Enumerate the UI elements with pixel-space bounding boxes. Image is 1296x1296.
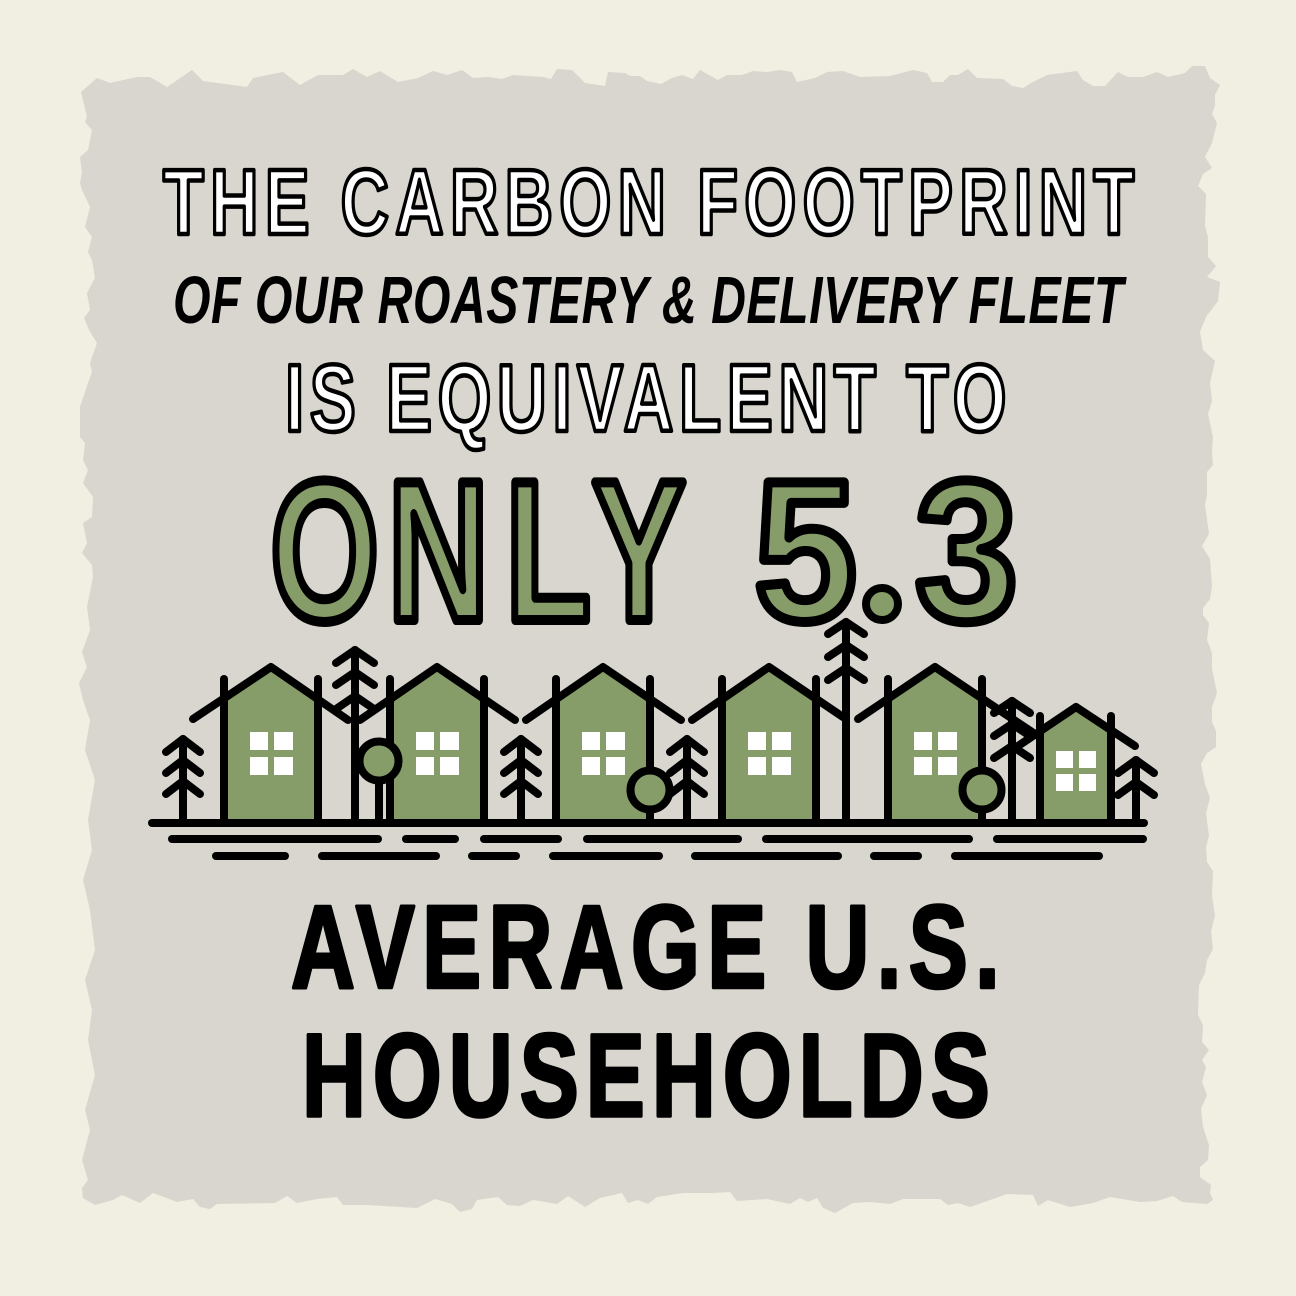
- small house: [1018, 707, 1135, 823]
- house 2: [360, 667, 515, 823]
- house 4: [692, 667, 843, 823]
- heading: households: HOUSEHOLDS: [302, 1011, 990, 1142]
- tree: tallest pine: [828, 622, 864, 823]
- tree: far left pine: [166, 739, 200, 823]
- panel: torn paper: [79, 66, 1220, 1213]
- round tree 1: [360, 742, 398, 823]
- big number: only 5.3: ONLY: [270, 439, 686, 663]
- tree: pine between houses 3 and 4: [670, 739, 704, 823]
- heading: average u.s.: AVERAGE U.S.: [291, 882, 1000, 1014]
- heading: is equivalent to: IS EQUIVALENT TO: [285, 344, 1006, 452]
- tree: tall pine between houses 1 and 2: [336, 650, 374, 823]
- heading: the carbon footprint: THE CARBON FOOTPRINT: [163, 151, 1134, 255]
- house 3: [526, 667, 681, 823]
- big number: only 5.3: [270, 439, 1018, 663]
- road dashes: [172, 839, 1143, 856]
- illustration: row of houses and trees: [152, 622, 1154, 856]
- round tree 3: [962, 770, 1002, 823]
- big number: only 5.3: 5.3: [754, 439, 1018, 663]
- tree: far right pine: [1118, 760, 1154, 823]
- subheading: of our roastery and delivery fleet: OF OUR ROASTERY & DELIVERY FLEET: [173, 263, 1127, 338]
- tree: pine between houses 2 and 3: [504, 739, 538, 823]
- house 1: [193, 667, 348, 823]
- house 5: [858, 667, 1032, 823]
- tree: pine by small house: [994, 701, 1030, 823]
- ground line: [152, 819, 1144, 827]
- round tree 2: [630, 770, 670, 823]
